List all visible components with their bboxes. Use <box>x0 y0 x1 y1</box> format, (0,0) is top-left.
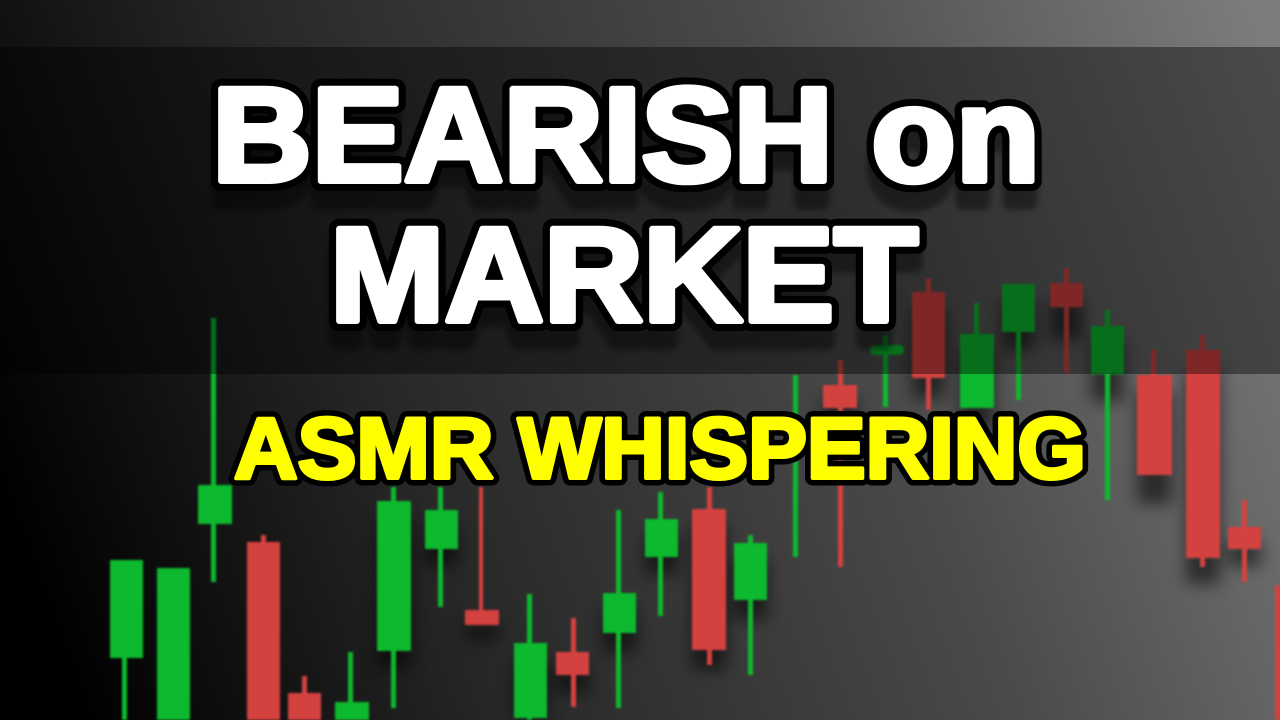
green candles <box>110 284 1124 720</box>
title drop shadow: MARKET <box>328 222 916 371</box>
title fill <box>212 61 1040 350</box>
title drop shadow <box>210 82 1038 371</box>
candlestick chart <box>110 268 1280 720</box>
candle shadows <box>377 300 1261 720</box>
title outline: MARKET <box>330 201 918 350</box>
title outline: BEARISH on <box>212 61 1040 210</box>
subtitle: ASMR WHISPERING <box>234 401 1086 497</box>
title fill: BEARISH on <box>212 61 1040 210</box>
dark title band <box>0 47 1280 374</box>
title drop shadow: BEARISH on <box>210 82 1038 231</box>
title: BEARISH on MARKET <box>210 61 1040 371</box>
red candles <box>247 268 1280 720</box>
subtitle fill: ASMR WHISPERING <box>234 401 1086 497</box>
title fill: MARKET <box>330 201 918 350</box>
title outline <box>212 61 1040 350</box>
subtitle outline: ASMR WHISPERING <box>234 401 1086 497</box>
